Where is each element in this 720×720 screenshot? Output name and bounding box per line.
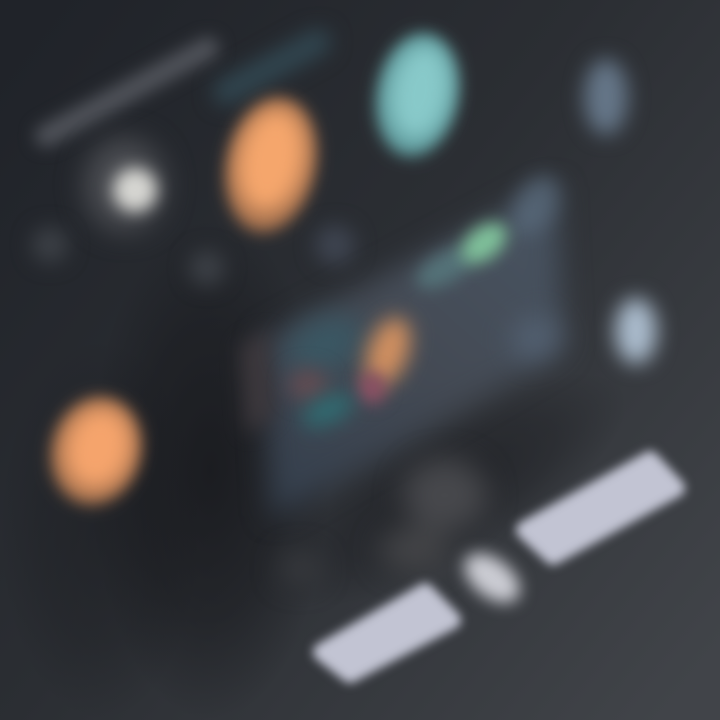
icon: orange blob lower [40,387,152,515]
icon: teal blob [367,27,467,163]
icon: pale blue blob right [615,298,657,364]
chart: red left [288,369,328,401]
icon: orange blob upper [214,89,328,241]
screen right lower spot [504,309,566,367]
dark shadow areas [0,220,658,720]
icon: grey-blue blob [584,59,628,135]
chart: orange peak [357,311,419,393]
screen upper-right highlight [502,167,568,243]
teal streak to green [410,239,480,297]
top teal bar [226,42,318,92]
chart: teal foot [297,386,359,434]
panel: monitor screen [240,167,568,518]
dim stand base [280,459,487,583]
small dark dots [32,225,355,286]
chart: pink foot [358,372,386,404]
mouse [455,543,529,613]
keyboard pill left [322,592,452,674]
chart: blue-teal area [278,305,372,385]
keyboard pill right [525,460,676,556]
chart: green highlight [454,214,514,272]
icon: white circle with halo [85,139,165,231]
top-left grey bar [46,48,208,136]
monitor bezel glow [240,330,275,435]
